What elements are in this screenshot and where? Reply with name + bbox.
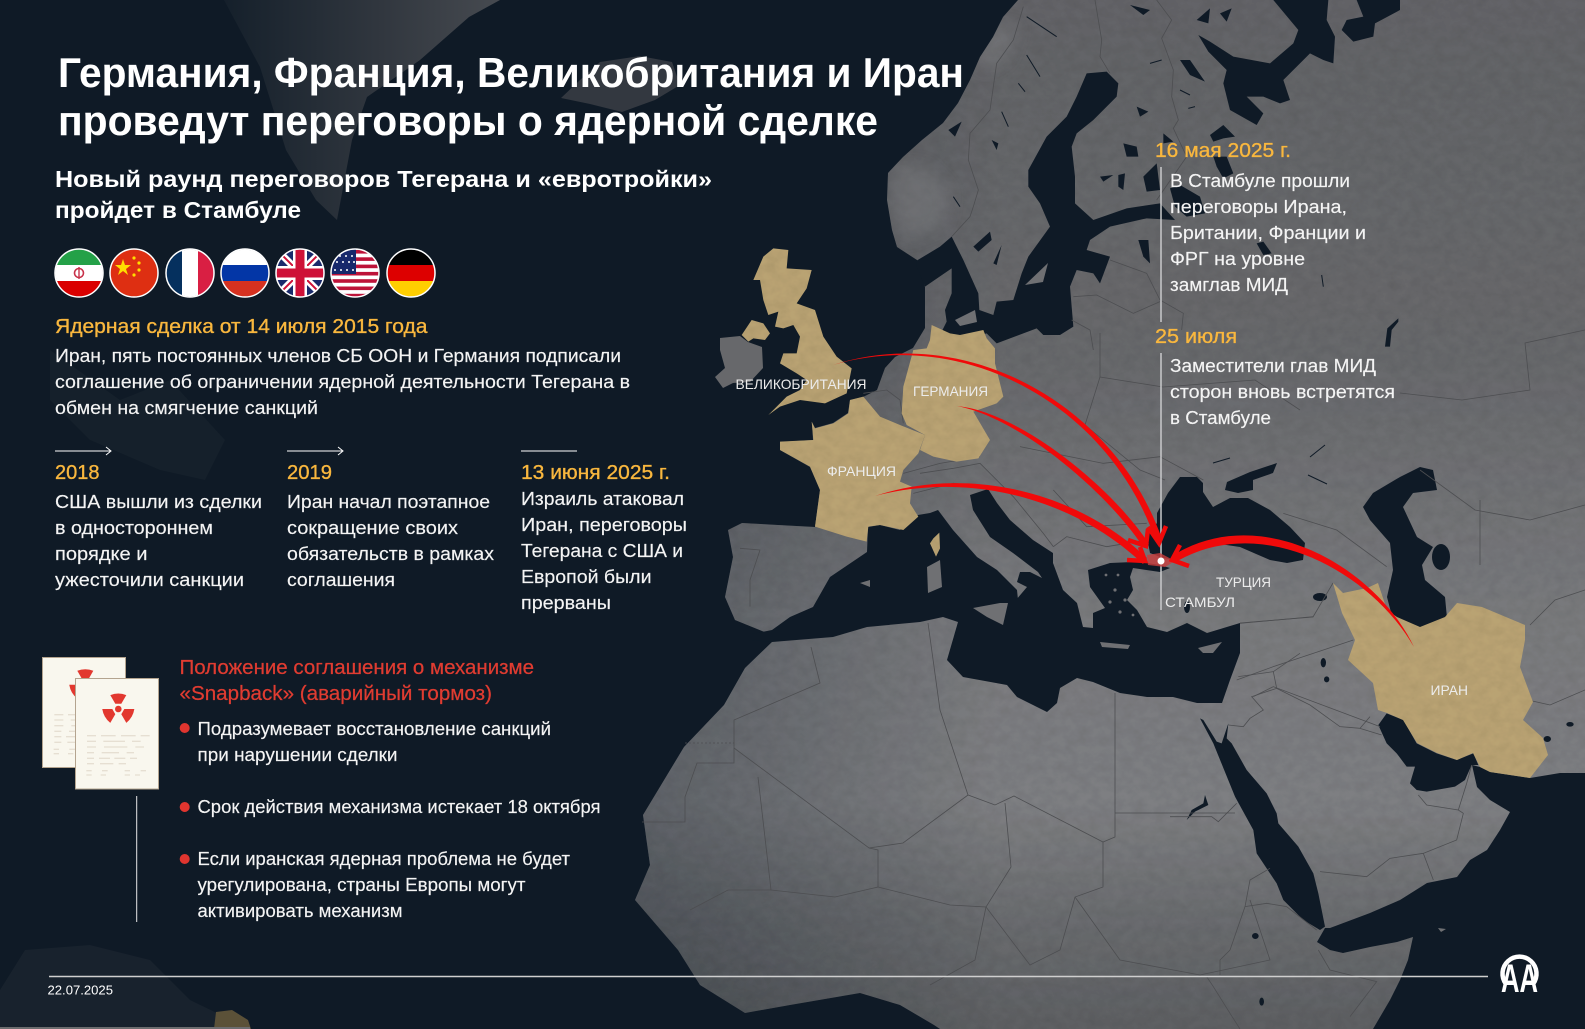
map: faint western landmasses <box>0 0 680 1029</box>
date: 22.07.2025 <box>48 982 113 998</box>
map: highlighted countries <box>742 248 1548 778</box>
divider: timeline <box>521 450 577 452</box>
flag: Germany <box>387 249 435 297</box>
flag: China <box>110 249 158 297</box>
arrow: France to Istanbul <box>875 483 1147 564</box>
arrow: Germany to Istanbul <box>957 406 1149 548</box>
map labels: ИРАН <box>1430 682 1468 698</box>
bullet: sanctions <box>180 718 551 765</box>
panel: timeline June 2025 <box>521 451 687 613</box>
map: seas of northern Europe and lakes <box>917 0 1400 347</box>
text: 2019 event: Иран начал поэтапное <box>287 491 490 512</box>
bullet: expiry: Срок действия механизма истекает 18 октября <box>198 796 600 817</box>
document: back <box>42 658 126 768</box>
marker: Istanbul point <box>1158 558 1164 564</box>
panel: nuclear deal description <box>55 315 630 418</box>
arrow: timeline <box>287 447 343 455</box>
text: deal description: обмен на смягчение санкций <box>55 397 318 418</box>
text: 25 July event: Заместители глав МИД <box>1170 355 1376 376</box>
text: 2019 event: соглашения <box>287 569 395 590</box>
arrow: Iran to Istanbul <box>1172 535 1414 647</box>
text: 2018 event <box>55 491 262 590</box>
subtitle: пройдет в Стамбуле <box>55 197 301 223</box>
map labels: ГЕРМАНИЯ <box>913 383 988 399</box>
text: 2018 event: США вышли из сделки <box>55 491 262 512</box>
map labels: ВЕЛИКОБРИТАНИЯ <box>736 376 866 392</box>
title <box>58 49 964 144</box>
map: country borders <box>642 0 1585 1029</box>
logo: Anadolu Agency <box>1501 957 1538 1001</box>
heading: 13 June 2025: 13 июня 2025 г. <box>521 461 670 484</box>
subtitle <box>55 166 712 223</box>
text: June 2025 event: Европой были <box>521 566 652 587</box>
heading: snapback: Положение соглашения о механизме <box>180 656 534 679</box>
panel: timeline 2018 <box>55 447 262 590</box>
text: deal description <box>55 345 630 418</box>
country: France <box>780 397 940 557</box>
bullet: activation: Если иранская ядерная проблема не будет <box>198 848 571 869</box>
text: 2018 event: порядке и <box>55 543 148 564</box>
bullet: sanctions: Подразумевает восстановление санкций <box>198 718 551 739</box>
text: 16 May event: ФРГ на уровне <box>1170 248 1305 269</box>
text: 16 May event: В Стамбуле прошли <box>1170 170 1350 191</box>
icon: nuclear documents <box>42 658 158 789</box>
map labels: СТАМБУЛ <box>1165 594 1235 610</box>
text: deal description: соглашение об ограничении ядерной деятельности Тегерана в <box>55 371 630 392</box>
footer rule <box>49 976 1488 978</box>
arrow: timeline <box>55 447 111 455</box>
map: timeline lines <box>1160 167 1162 610</box>
text: June 2025 event: Тегерана с США и <box>521 540 683 561</box>
text: June 2025 event <box>521 488 687 613</box>
map: land of Europe, Asia and Africa <box>635 0 1585 1029</box>
heading: snapback: «Snapback» (аварийный тормоз) <box>180 682 492 705</box>
panel: 25 July <box>1155 325 1395 428</box>
flag: Russia <box>221 249 269 297</box>
subtitle: Новый раунд переговоров Тегерана и «евротройки» <box>55 166 712 192</box>
bullet: activation: активировать механизм <box>198 900 402 921</box>
map: relief highlight over Norway <box>892 28 1012 234</box>
flag: USA <box>331 249 379 297</box>
panel: 16 May 2025 <box>1155 139 1366 295</box>
country: Germany <box>902 325 1003 462</box>
text: 2018 event: в одностороннем <box>55 517 213 538</box>
map: islands <box>715 263 1446 932</box>
text: 2019 event <box>287 491 495 590</box>
bullet: activation <box>180 848 571 921</box>
map: Red Sea, Persian Gulf and inland waters <box>1187 658 1574 1006</box>
text: 25 July event <box>1170 355 1395 428</box>
map: Mediterranean, Black and Caspian seas <box>752 445 1450 712</box>
bullet: sanctions: при нарушении сделки <box>198 744 398 765</box>
heading: 16 May: 16 мая 2025 г. <box>1155 139 1291 162</box>
heading: 25 July: 25 июля <box>1155 325 1237 348</box>
text: 16 May event: Британии, Франции и <box>1170 222 1366 243</box>
map labels: ФРАНЦИЯ <box>827 463 896 479</box>
heading: snapback <box>180 656 534 705</box>
arrow: United Kingdom to Istanbul <box>833 353 1166 543</box>
logo: Anadolu Agency: AA <box>1501 957 1538 1001</box>
map: Istanbul highlight <box>1147 553 1175 567</box>
panel: timeline 2019 <box>287 447 495 590</box>
flag: United Kingdom <box>276 249 324 297</box>
text: 16 May event <box>1170 170 1366 295</box>
title: Германия, Франция, Великобритания и Иран <box>58 49 964 96</box>
heading: nuclear deal: Ядерная сделка от 14 июля 2015 года <box>55 315 428 338</box>
flags row <box>55 249 435 297</box>
text: June 2025 event: прерваны <box>521 592 611 613</box>
text: 25 July event: сторон вновь встретятся <box>1170 381 1395 402</box>
country: Iran <box>1333 583 1548 778</box>
title: проведут переговоры о ядерной сделке <box>58 97 878 144</box>
text: 2019 event: обязательств в рамках <box>287 543 495 564</box>
text: June 2025 event: Иран, переговоры <box>521 514 687 535</box>
heading: 2018: 2018 <box>55 461 100 484</box>
flag: France <box>166 249 214 297</box>
flag: Iran <box>55 249 103 297</box>
text: deal description: Иран, пять постоянных членов СБ ООН и Германия подписали <box>55 345 621 366</box>
text: 25 July event: в Стамбуле <box>1170 407 1271 428</box>
text: June 2025 event: Израиль атаковал <box>521 488 684 509</box>
map labels: ТУРЦИЯ <box>1216 574 1271 590</box>
heading: 2019: 2019 <box>287 461 332 484</box>
text: 16 May event: переговоры Ирана, <box>1170 196 1347 217</box>
country: United Kingdom <box>742 248 852 415</box>
text: 16 May event: замглав МИД <box>1170 274 1288 295</box>
text: 2018 event: ужесточили санкции <box>55 569 244 590</box>
map labels <box>736 376 1468 698</box>
text: 2019 event: сокращение своих <box>287 517 459 538</box>
divider: snapback <box>136 796 138 922</box>
panel: snapback mechanism <box>180 656 600 921</box>
document: front <box>76 678 158 789</box>
bullet: activation: урегулирована, страны Европы могут <box>198 874 526 895</box>
